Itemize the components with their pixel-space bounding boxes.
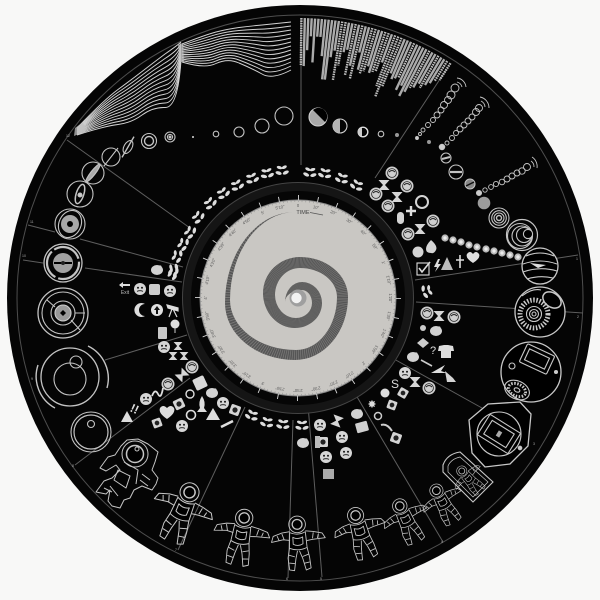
wave lines: right section [182,22,291,76]
small edge numbers: 2 [577,315,579,319]
chain of filled beads [441,234,522,261]
astronaut 1 [96,439,158,508]
planet: gapped ring [44,244,82,282]
icon: globe [340,447,352,459]
planet: capsule circle [67,181,93,207]
label time scale: 1' [381,260,386,265]
icon: figure [330,414,344,428]
icon: figure [169,352,177,360]
planet: helmet ring [71,412,111,452]
ring with bar filled [465,179,475,189]
icon: face [320,451,332,463]
icon: diamond [417,338,429,348]
icon: crowned ball [386,166,398,180]
label time scale: 20" [330,209,338,216]
icon: small figure [420,325,426,331]
icon: tall block [315,436,320,448]
small edge numbers: 12 [66,134,70,138]
icon: exclamation marks: !! [128,401,141,417]
icon: dish [434,311,444,321]
time heading with arrow: TIME [296,210,310,216]
label time scale: 3' [260,380,265,386]
chain of rings C [476,157,537,196]
label time scale: 4'40" [228,227,238,238]
icon: gem ring [186,410,196,420]
planet: dot [192,136,194,138]
concentric rings planet [489,208,509,228]
icon: heart [160,406,174,419]
label time scale: 0 [297,203,300,208]
small edge numbers: 8 [72,464,74,468]
astronaut capsule [443,452,493,503]
label time scale: 5'10" [275,204,285,211]
icon: bolt [434,259,441,272]
label time scale: 4'20" [208,257,217,268]
icon: diamond ring [186,390,194,398]
icon: moon [134,303,145,317]
icon: beetle [351,409,363,419]
small edge numbers: 10 [22,254,26,258]
icon: frame [386,399,398,411]
label time scale: 1'20" [388,293,393,303]
label time scale: 30" [345,217,354,225]
icon: hourglass [414,224,426,234]
planet: large ring with arcs [36,346,108,408]
wave lines: left section [77,42,181,135]
icon: up arrow circle [151,304,163,316]
astronaut 2 [142,472,222,553]
planet: saturn [119,135,137,159]
icon: ball [400,180,414,192]
label time scale: 3'20" [227,358,238,368]
small edge numbers: 4 [441,540,443,544]
small edge numbers: 1 [576,257,578,261]
icon: telescope [167,305,178,317]
icon: warning triangle [121,411,133,422]
eccentric rings planet [506,220,538,250]
icon: t-shirt [438,345,454,358]
large planet: striped sphere [522,248,558,284]
label time scale: 4'50" [241,216,252,226]
planet: ringed disc [54,207,86,241]
icon: ringed face [162,378,174,390]
label time scale: 2'40" [293,388,303,393]
icon: rocket [197,396,207,412]
icon: heart [467,252,479,263]
label time scale: 1'30" [385,311,392,322]
icon: checkbox [417,262,430,275]
astronaut 6 [376,490,438,552]
icon: squiggle [152,388,163,396]
small edge numbers: 5 [320,577,322,581]
icon cluster: right [351,306,460,420]
icon: plus [406,206,416,216]
icon: sad face [140,393,152,405]
icon: ball [426,214,440,228]
moon: tiny ring [378,131,384,137]
small edge numbers: 9 [31,377,33,381]
label time scale: 2'20" [328,379,339,388]
icon: label [323,469,334,479]
icon: star: ✸ [367,399,377,411]
icon: ball [402,228,414,240]
label tick marks [198,198,398,398]
icon: figure [180,352,188,360]
icon: face [134,283,146,295]
icon: face [217,397,229,409]
icon: ball [370,188,382,200]
small edge numbers: 7 [175,548,177,552]
icon: triangle pattern [206,408,220,420]
label spiral [225,212,348,360]
planet: circle 1 [275,107,293,125]
chain of rings B [439,97,489,150]
icon: ball [448,310,460,324]
moon: dot far [427,140,431,144]
icon: jar [158,327,167,339]
planet: slashed circle [102,148,120,166]
large planet: turbine sphere [515,287,565,337]
icon: ball [382,200,394,212]
label time scale: 3'40" [208,328,217,339]
icon: exit sign [119,282,130,296]
icon: jug [430,326,442,336]
icon cluster: left [119,265,241,432]
icon: cat [206,388,218,398]
large planet: panel sphere [501,342,561,404]
label time scale: 1'50" [370,344,380,355]
icon: arrow circle [336,431,348,443]
icon: helmet [186,360,198,374]
astronaut 5 [329,501,393,565]
planet: circle 4 [213,131,219,137]
icon: swirl: S [391,377,399,391]
icon: lock [397,212,404,224]
planet: spindle circle [82,162,104,184]
label time scale: 4'10" [204,274,211,285]
small edge numbers [22,134,579,581]
label time scale: 2'10" [344,370,355,380]
ring with bar medium [449,165,463,179]
icon: block [318,437,328,447]
icon cluster: bottom [297,414,402,479]
icon: globe [314,419,326,431]
icon: seated figure [149,284,160,295]
astronaut 3 [209,505,274,570]
icon: globe [164,285,176,297]
label time scale: 3'50" [204,311,211,321]
moon phase: half [333,119,347,133]
label time scale: 3'10" [241,370,252,380]
icon: framed square [390,432,402,444]
label time scale: 3'30" [216,344,226,355]
wave fold highlights [74,43,184,136]
label time scale: 1'10" [385,275,392,285]
planet: circle 3 [234,127,244,137]
icon: blob [297,438,309,448]
icon: apple [412,246,424,258]
icon: square [192,375,208,391]
planet: double ring [142,134,156,148]
icon: cross [456,255,464,268]
icon: stamp [151,417,163,429]
label time scale: 10" [313,204,320,210]
astronaut 4 [270,515,327,572]
label time scale: 2'50" [274,385,285,392]
spindle hole [290,290,306,306]
icon: blob [407,352,419,362]
label time scale [203,203,393,393]
icon: circle [380,388,390,398]
bird ring icons [167,164,434,431]
moon phase: large [309,108,327,126]
center label ring [182,182,414,414]
label time scale: 50" [371,243,379,251]
icon: plane [431,365,447,373]
chain of rings A [416,78,466,140]
label time scale: 2'30" [311,385,321,392]
planet: circle 2 [255,119,269,133]
icon cluster: upper right [370,166,479,275]
icon: exit sign: Exit [121,290,130,296]
grey sphere [478,197,490,209]
icon: cup [420,306,434,320]
planets arc: solar system row [36,107,538,452]
label time scale: 2' [360,361,366,366]
small edge numbers: 11 [30,220,34,224]
icon: balloon [170,320,180,333]
large planet: octagonal module [469,402,531,467]
icon: figure [410,377,420,387]
icon: book [355,421,369,433]
icon: pot [151,265,163,275]
small edge numbers: 3 [533,442,535,446]
astronaut 7 [415,474,473,533]
icon: question mark: ? [430,345,436,357]
icon: hourglass [392,192,402,202]
planet: spoked ring [38,288,88,338]
icon: swoosh [381,425,392,431]
icon: boot [445,371,456,382]
icon: flame [426,240,436,253]
icon: disc [374,412,382,420]
moon phase: small [358,127,368,137]
small edge numbers: 6 [286,577,288,581]
data bars fan [301,18,450,96]
icon: arrow [421,360,432,366]
icon: praying hands [441,257,453,270]
icon: music notes [166,265,181,282]
icon: bar [221,421,233,427]
icon: hourglass [378,180,390,190]
icon: no sign [158,341,170,353]
icon: tablet [397,387,409,399]
label time scale: 4' [203,296,208,300]
label time scale: 5' [260,210,265,215]
icon: numbered tag [229,404,241,416]
icon: gift [172,397,186,411]
label time scale: 40" [359,229,368,237]
icon: figure [174,342,182,350]
time heading with arrow [296,210,323,216]
label time scale: 4'30" [216,241,226,252]
icon: letter circle [176,420,188,432]
icon: face [399,367,411,379]
icon: plane [175,368,189,382]
icon: ring [416,196,428,208]
icon: cup [422,382,436,394]
planet: ringed small [165,132,175,142]
moon: dot [395,133,399,137]
label time scale: 1'40" [379,328,388,339]
ring with bar small [441,153,451,163]
